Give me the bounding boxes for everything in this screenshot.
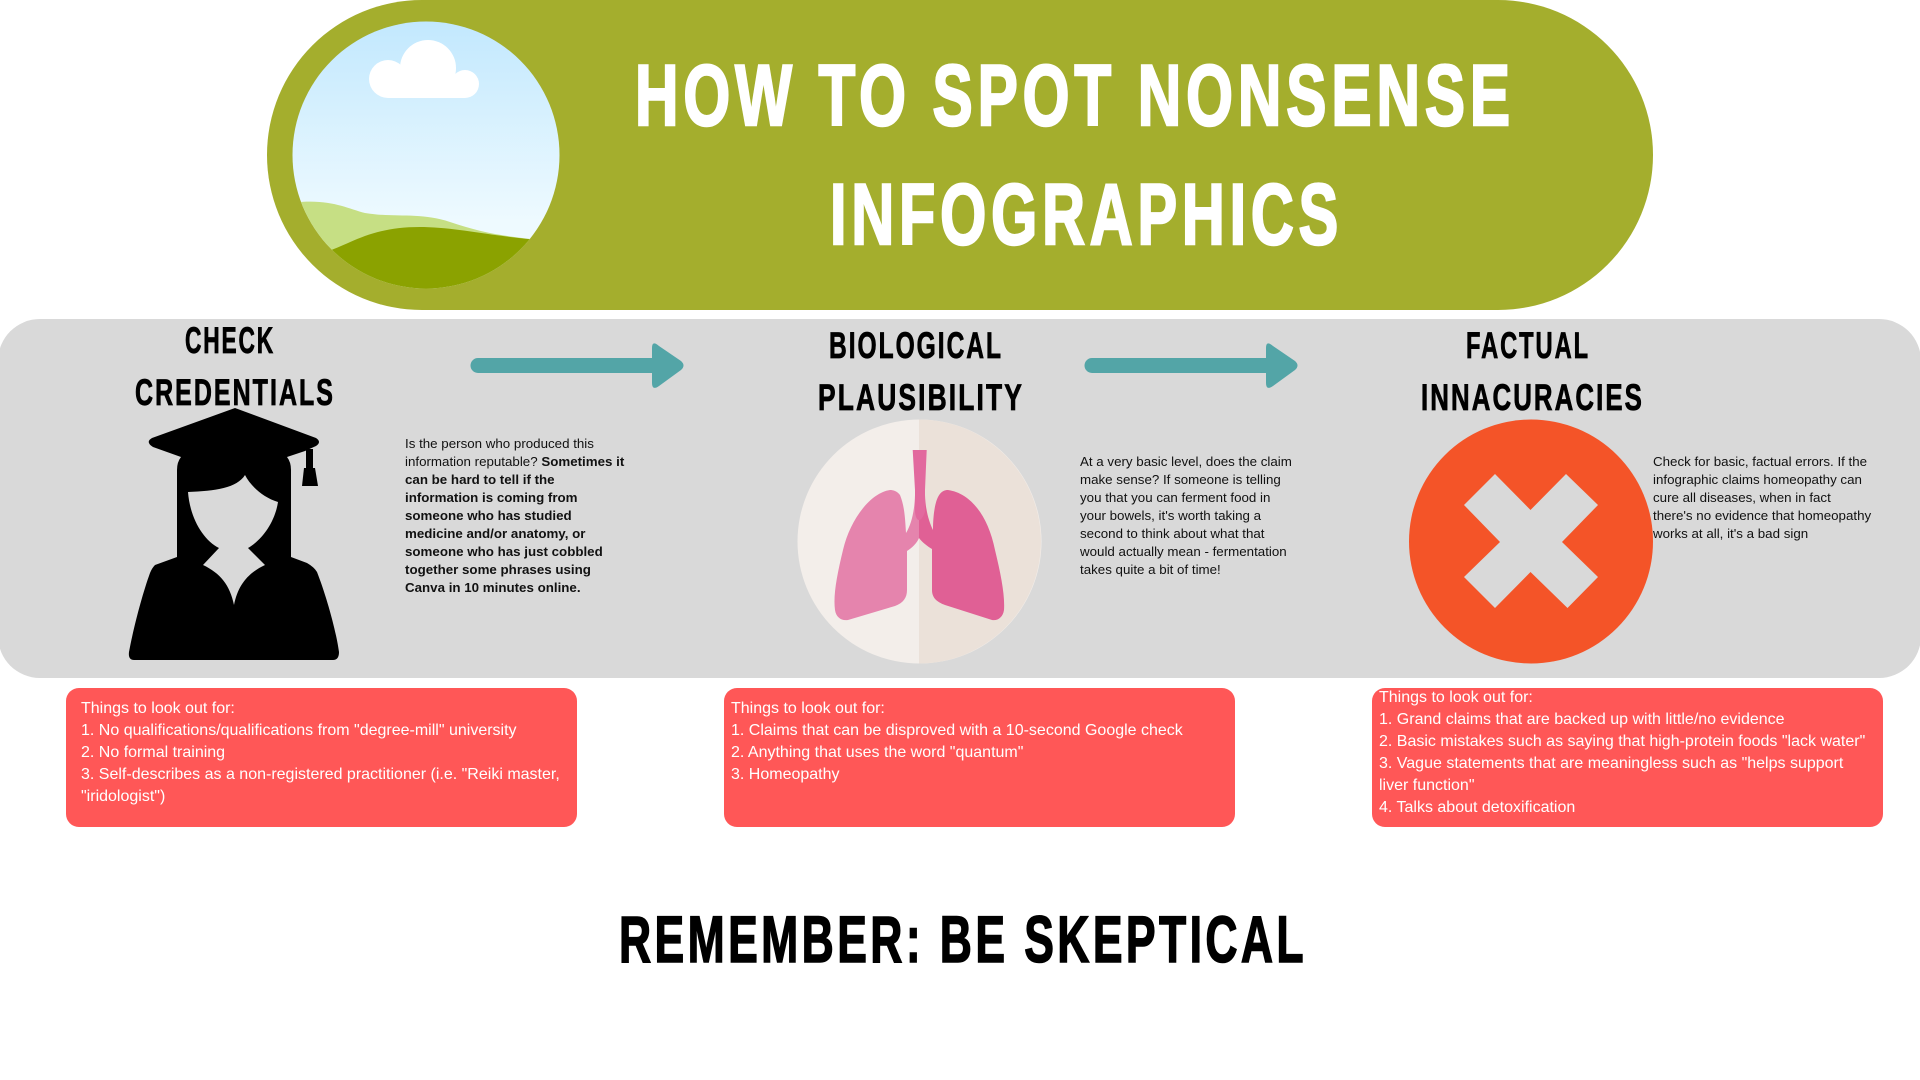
text: credentials description: someone who has studied — [405, 508, 572, 523]
callout: credentials warning signs: "iridologist") — [81, 788, 165, 805]
text: credentials description: can be hard to tell if the — [405, 472, 555, 487]
title text — [635, 48, 1515, 263]
text: credentials description: Is the person who produced this — [405, 436, 594, 451]
text: plausibility description: your bowels, it's worth taking a — [1080, 508, 1261, 523]
arrow 2 — [1084, 343, 1298, 388]
heading: check credentials — [135, 320, 335, 413]
icon: lungs — [798, 420, 1042, 664]
callout: inaccuracies warning signs: Things to look out for: — [1379, 689, 1533, 706]
callout: credentials warning signs: Things to look out for: — [81, 700, 235, 717]
text: inaccuracies description: Check for basic, factual errors. If the — [1653, 454, 1867, 469]
text: inaccuracies description: there's no evidence that homeopathy — [1653, 508, 1871, 523]
heading: biological plausibility: PLAUSIBILITY — [818, 377, 1024, 418]
text: credentials description: information is coming from — [405, 490, 578, 505]
heading: biological plausibility — [818, 325, 1024, 418]
callout: plausibility warning signs: 1. Claims that can be disproved with a 10-second Google check — [731, 722, 1183, 739]
closing message: REMEMBER: BE SKEPTICAL — [619, 903, 1307, 976]
text: plausibility description: At a very basic level, does the claim — [1080, 454, 1292, 469]
heading: factual innacuracies — [1421, 325, 1644, 418]
callout: inaccuracies warning signs: 2. Basic mistakes such as saying that high-protein foods "lack water" — [1379, 733, 1865, 750]
callout: credentials warning signs: 3. Self-describes as a non-registered practitioner (i.e. "Reiki master, — [81, 766, 560, 783]
title text: INFOGRAPHICS — [830, 167, 1343, 263]
text: plausibility description: takes quite a bit of time! — [1080, 562, 1221, 577]
text: inaccuracies description: cure all diseases, when in fact — [1653, 490, 1831, 505]
icon: red circle cross — [1409, 420, 1653, 664]
callout: inaccuracies warning signs — [1372, 688, 1883, 827]
text: credentials description — [405, 436, 624, 595]
heading: check credentials: CHECK — [185, 320, 275, 361]
banner pill — [267, 0, 1653, 310]
text: credentials description: someone who has just cobbled — [405, 544, 603, 559]
text: credentials description: medicine and/or anatomy, or — [405, 526, 585, 541]
callout: credentials warning signs: 2. No formal training — [81, 744, 225, 761]
callout: credentials warning signs: 1. No qualifications/qualifications from "degree-mill" university — [81, 722, 517, 739]
callout: credentials warning signs — [66, 688, 577, 827]
text: plausibility description — [1080, 454, 1292, 577]
callout: plausibility warning signs: 3. Homeopathy — [731, 766, 840, 783]
title text: HOW TO SPOT NONSENSE — [635, 48, 1515, 144]
text: credentials description: information reputable? Sometimes it — [405, 454, 624, 469]
text: plausibility description: second to think about what that — [1080, 526, 1264, 541]
text: credentials description: together some phrases using — [405, 562, 591, 577]
panel: grey band — [0, 319, 1920, 678]
heading: factual innacuracies: INNACURACIES — [1421, 377, 1644, 418]
heading: biological plausibility: BIOLOGICAL — [829, 325, 1003, 366]
text: plausibility description: would actually mean - fermentation — [1080, 544, 1287, 559]
icon: landscape circle — [290, 21, 560, 290]
callout: plausibility warning signs — [724, 688, 1235, 827]
text: plausibility description: you that you can ferment food in — [1080, 490, 1270, 505]
title banner — [267, 0, 1653, 310]
callout: plausibility warning signs: Things to look out for: — [731, 700, 885, 717]
text: inaccuracies description: infographic claims homeopathy can — [1653, 472, 1862, 487]
text: inaccuracies description: works at all, it's a bad sign — [1653, 526, 1808, 541]
callout: inaccuracies warning signs: liver function" — [1379, 777, 1474, 794]
text: plausibility description: make sense? If someone is telling — [1080, 472, 1281, 487]
callout: inaccuracies warning signs: 4. Talks about detoxification — [1379, 799, 1575, 816]
callout: inaccuracies warning signs: 3. Vague statements that are meaningless such as "helps support — [1379, 755, 1843, 772]
text: inaccuracies description — [1653, 454, 1872, 541]
arrow 1 — [471, 343, 684, 388]
callout: plausibility warning signs: 2. Anything that uses the word "quantum" — [731, 744, 1023, 761]
callout: inaccuracies warning signs: 1. Grand claims that are backed up with little/no evidence — [1379, 711, 1785, 728]
icon: graduate silhouette — [129, 408, 339, 660]
text: credentials description: Canva in 10 minutes online. — [405, 580, 581, 595]
heading: factual innacuracies: FACTUAL — [1466, 325, 1590, 366]
heading: check credentials: CREDENTIALS — [135, 372, 335, 413]
